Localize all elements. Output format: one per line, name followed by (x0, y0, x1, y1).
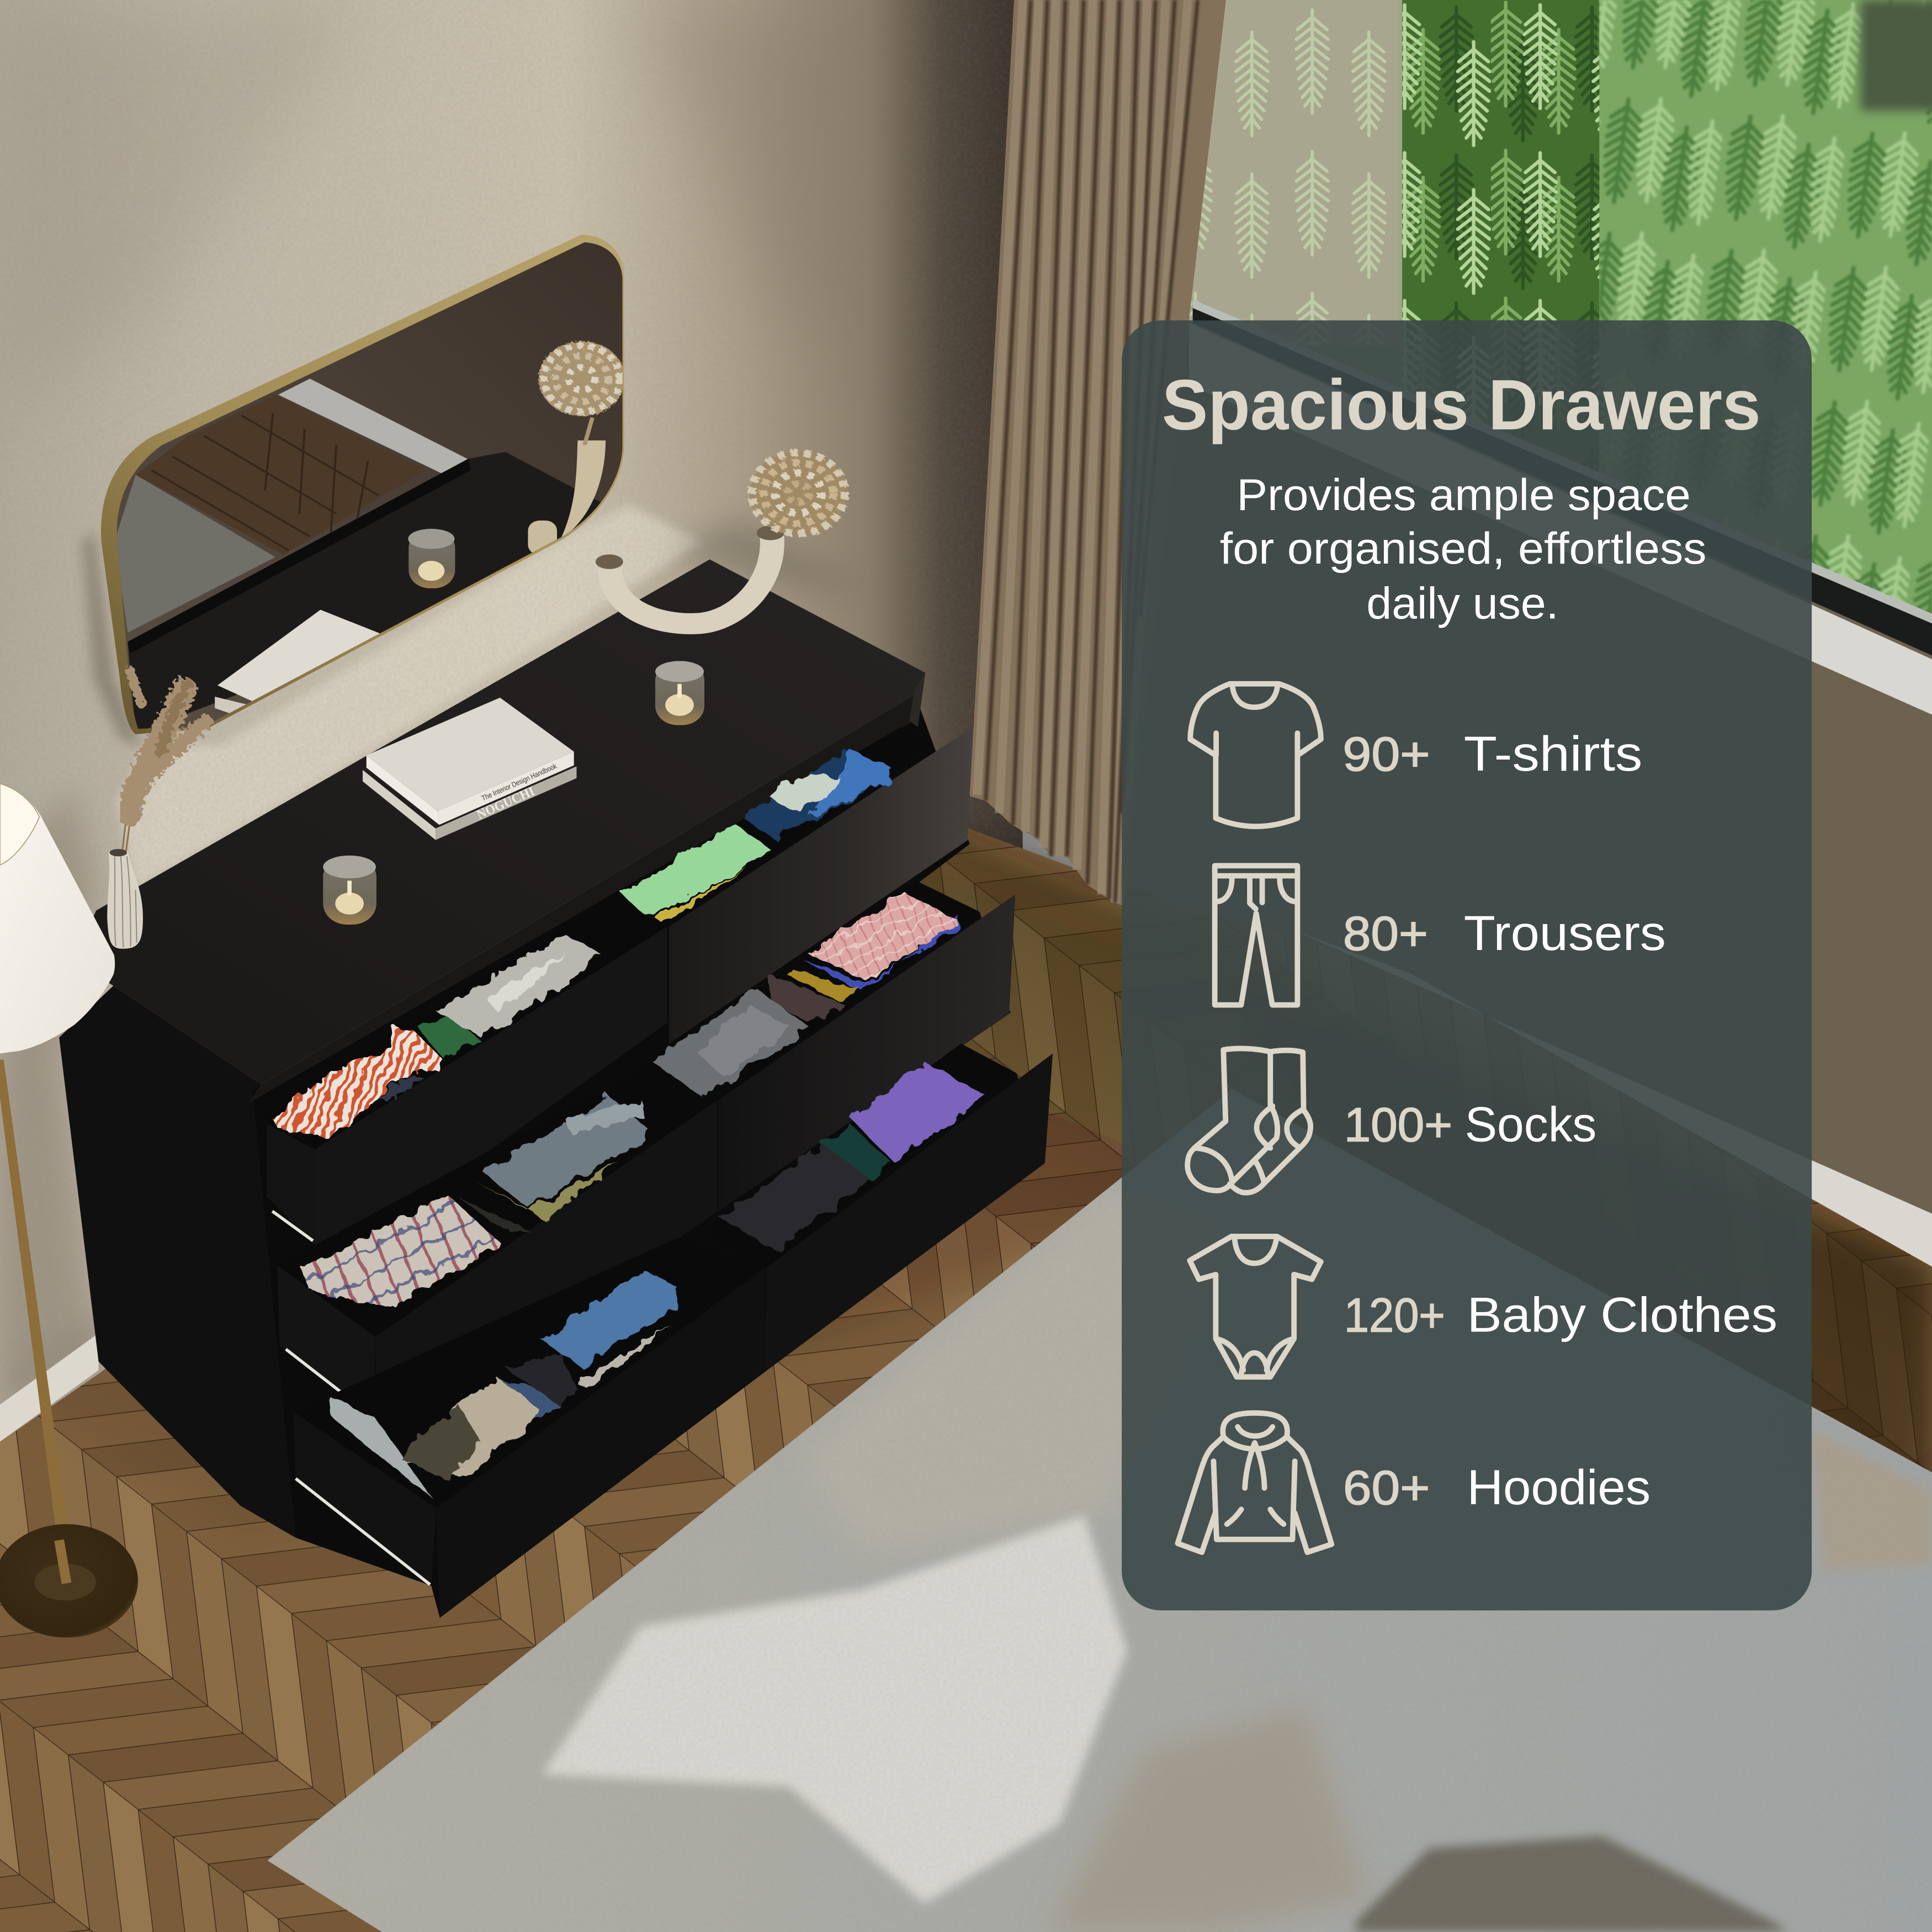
icon: socks (1187, 1048, 1310, 1193)
top-left drawer (264, 897, 667, 1276)
description: Provides ample space (1236, 470, 1691, 520)
window sill and dark frame (1189, 299, 1932, 715)
drawers (264, 727, 1053, 1618)
floor: herringbone parquet (0, 789, 1932, 1932)
blue shirt stack (742, 751, 891, 840)
row: trousers (1215, 866, 1666, 1005)
row: hoodies (1177, 1413, 1650, 1552)
pampas plume (128, 672, 207, 813)
row: t-shirts: 90+ (1342, 728, 1430, 781)
mirror wall shadow (83, 532, 141, 747)
candle right (655, 661, 704, 725)
row: trousers: Trousers (1464, 905, 1666, 960)
title: Spacious Drawers (1162, 365, 1761, 445)
icon: t-shirt (1190, 684, 1321, 826)
description: for organised, effortless (1220, 524, 1707, 574)
dresser body (59, 559, 1045, 1618)
icon: trousers (1215, 866, 1297, 1005)
small ribbed vase with pampas grass (107, 672, 207, 949)
panel background (1122, 320, 1812, 1610)
lamp base (0, 1524, 138, 1638)
purple t-shirt (821, 1124, 893, 1181)
row: socks: 100+ (1344, 1098, 1452, 1152)
mirror on the wall (83, 221, 664, 770)
grey knit jumper (652, 987, 811, 1097)
mirror glass with reflection (83, 221, 664, 770)
icon: baby bodysuit (1190, 1236, 1321, 1377)
bottom-right drawer (702, 1044, 1053, 1373)
row: hoodies: 60+ (1343, 1461, 1430, 1515)
window with foliage (1183, 0, 1932, 665)
rug (246, 1084, 1932, 1932)
slate shirt (473, 1164, 618, 1219)
baseboards (0, 930, 1932, 1442)
row: socks: Socks (1465, 1097, 1596, 1152)
folded clothes inside drawers (272, 751, 985, 1499)
row: socks (1187, 1048, 1596, 1193)
U-shaped vase (596, 526, 784, 624)
icon: hoodie (1177, 1413, 1331, 1552)
floor lamp (0, 784, 138, 1638)
mirror gold frame (101, 235, 624, 734)
mint t-shirt (622, 822, 771, 915)
books (363, 698, 577, 840)
info panel (1122, 320, 1812, 1610)
book spine text (475, 762, 558, 822)
beige check and olive stack (497, 1379, 560, 1430)
jeans stack (507, 1352, 576, 1406)
dresser top surface (74, 559, 925, 1084)
row: t-shirts: T-shirts (1464, 726, 1642, 781)
soft foliage (1599, 0, 1932, 665)
top-right drawer (612, 727, 973, 1044)
description: daily use. (1366, 579, 1559, 629)
row: hoodies: Hoodies (1467, 1459, 1650, 1515)
book spine text: NOGUCHI (475, 784, 537, 822)
row: baby clothes: 120+ (1344, 1288, 1445, 1342)
pale trunk side (1189, 0, 1402, 320)
reflected candle (408, 529, 455, 588)
right wall under window (1109, 327, 1932, 1232)
dried hydrangea (750, 451, 847, 535)
pale shirt (330, 1397, 433, 1499)
striped shirt (272, 1029, 442, 1137)
reflected vase (561, 440, 606, 539)
candle left (323, 856, 376, 925)
green shirt (417, 1017, 481, 1059)
dresser top front edge (249, 695, 914, 1103)
row: t-shirts (1190, 684, 1642, 826)
lamp shade (0, 784, 115, 1053)
middle-left drawer (277, 1065, 717, 1454)
lamp stem (0, 1060, 71, 1555)
back wall (0, 0, 1023, 1454)
row: baby clothes (1190, 1236, 1777, 1377)
plaid shirt (301, 1196, 502, 1307)
pink plaid shirt (803, 915, 959, 993)
row: baby clothes: Baby Clothes (1467, 1287, 1777, 1342)
row: trousers: 80+ (1343, 907, 1428, 960)
black jeans (718, 1145, 869, 1250)
book spine text: The Interior Design Handbook (480, 762, 558, 803)
middle-right drawer (649, 882, 1015, 1211)
vase body (107, 851, 143, 949)
decor on dresser top (323, 451, 847, 925)
white-grey shirt (436, 934, 601, 1038)
curtain (970, 0, 1226, 906)
bottom-left drawer (293, 1238, 765, 1618)
crisp foliage (1402, 0, 1599, 493)
reflected dried flower (539, 341, 625, 416)
description (1220, 470, 1707, 629)
